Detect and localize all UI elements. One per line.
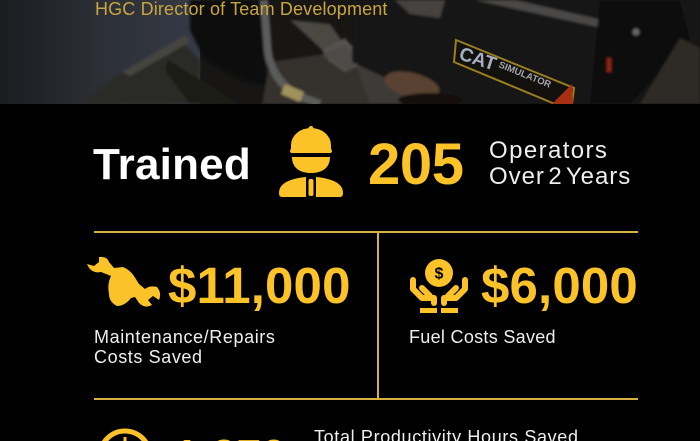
label: maintenance/repairs costs saved: Costs Saved [94,347,203,367]
stat: $11,000: $11,000 [168,257,351,314]
panel: productivity hours (cropped by frame) [102,427,579,441]
label: maintenance/repairs costs saved: Maintenance/Repairs [94,327,276,347]
text: operators over 2 years [489,137,631,190]
icon: hands with coin [410,259,468,313]
icon: wrench [87,256,160,307]
icon: construction worker [279,126,343,197]
stat: $6,000: $6,000 [481,257,638,314]
stat: 205: 205 [368,132,464,197]
label: maintenance/repairs costs saved [94,327,276,367]
divider: top horizontal [94,231,638,232]
icon: clock [102,428,148,441]
heading: Trained: Trained [93,140,251,189]
text: operators over 2 years: Operators [489,137,608,164]
panel: maintenance costs [87,256,351,367]
hero photo: operator at Cat simulator: CAT [456,44,499,76]
panel: fuel costs [409,257,638,347]
icon: hands with coin: $ [435,266,444,282]
divider: vertical [377,231,378,399]
text: operators over 2 years: Over 2 Years [489,163,631,190]
hero photo: operator at Cat simulator [0,0,700,104]
hero photo: operator at Cat simulator: SIMULATOR [497,60,553,91]
divider: bottom horizontal [94,398,638,400]
label: fuel costs saved: Fuel Costs Saved [409,327,556,347]
